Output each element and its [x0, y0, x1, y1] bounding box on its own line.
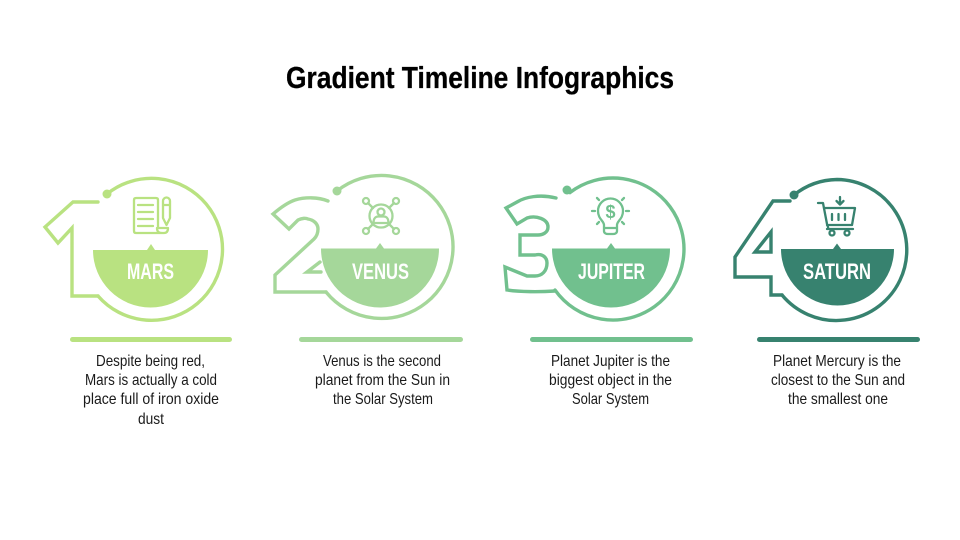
text: Mars description: dust	[138, 411, 164, 428]
title: Gradient Timeline Infographics	[286, 60, 674, 95]
panel: Venus	[273, 175, 463, 408]
ring start dot	[102, 190, 112, 198]
panel: Mars	[45, 178, 232, 428]
number 2 outline with ring	[273, 175, 453, 318]
text: Jupiter description: Solar System	[572, 391, 649, 408]
bar: Venus	[299, 337, 463, 342]
icon: shopping cart	[818, 197, 855, 236]
text: Mars description: place full of iron oxide	[83, 391, 219, 408]
label semicircle: Jupiter	[552, 243, 670, 308]
bar: Mars	[70, 337, 232, 342]
ring start dot	[790, 190, 798, 200]
text: Jupiter description: biggest object in the	[549, 372, 672, 389]
text: Venus description: the Solar System	[333, 391, 433, 408]
text: Saturn description: the smallest one	[788, 391, 888, 408]
panel: Jupiter	[505, 178, 693, 408]
text: Jupiter description: Planet Jupiter is the	[551, 353, 670, 370]
number 1 outline with ring	[45, 178, 223, 320]
label: Venus: VENUS	[352, 259, 409, 284]
bar: Saturn	[757, 337, 920, 342]
label semicircle: Saturn	[781, 244, 894, 306]
number 3 outline with ring	[505, 178, 684, 320]
bar: Jupiter	[530, 337, 693, 342]
text: Saturn description: Planet Mercury is the	[773, 353, 901, 370]
label semicircle: Mars	[93, 244, 208, 307]
text: Saturn description	[771, 353, 905, 408]
text: Venus description: Venus is the second	[323, 353, 441, 370]
text: Mars description	[83, 353, 219, 428]
icon: document and pencil	[134, 198, 170, 233]
label: Jupiter: JUPITER	[578, 259, 645, 284]
ring start dot	[562, 186, 572, 194]
text: Mars description: Mars is actually a cold	[85, 372, 217, 389]
text: Venus description: planet from the Sun in	[315, 372, 450, 389]
icon: dollar light bulb	[592, 198, 629, 234]
panel: Saturn	[735, 180, 920, 408]
label semicircle: Venus	[321, 243, 439, 308]
text: Saturn description: closest to the Sun and	[771, 372, 905, 389]
label: Mars: MARS	[127, 259, 174, 284]
text: Venus description	[315, 353, 450, 408]
number 4 outline with ring	[735, 180, 907, 320]
text: Mars description: Despite being red,	[96, 353, 205, 370]
icon: network user	[363, 198, 399, 234]
text: Jupiter description	[549, 353, 672, 408]
label: Saturn: SATURN	[803, 259, 871, 284]
ring start dot	[332, 186, 342, 196]
icon: dollar light bulb: $	[605, 202, 616, 222]
